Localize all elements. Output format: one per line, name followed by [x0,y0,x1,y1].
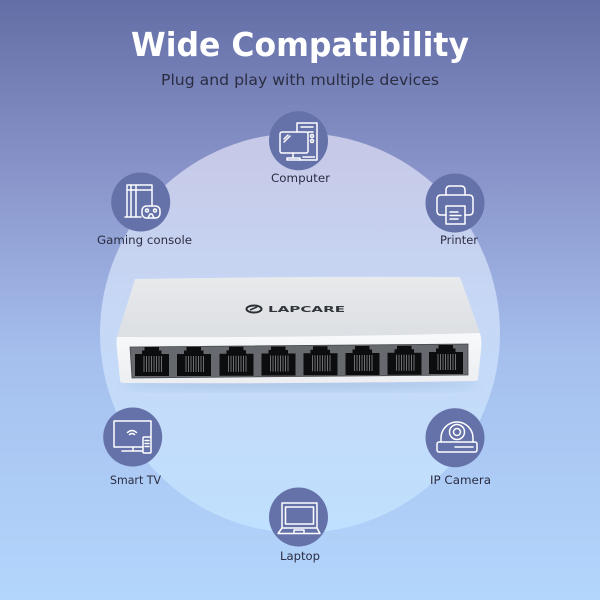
title: Wide Compatibility [131,25,469,64]
device: ip camera [426,408,491,487]
device: gaming console: Gaming console [97,233,192,247]
switch front [116,333,481,383]
device: printer [426,174,484,247]
device: computer [269,111,330,185]
device: laptop [269,488,328,563]
device: printer: Printer [440,233,478,247]
device: smart tv [103,408,162,487]
background circle [100,133,500,533]
subtitle: Plug and play with multiple devices [161,71,439,89]
switch shadow [120,379,480,389]
switch top [117,277,480,337]
device: gaming console [97,172,192,247]
ports [135,345,463,376]
device: laptop: Laptop [280,549,320,563]
device: computer: Computer [271,171,330,185]
network switch [116,277,481,389]
device: ip camera: IP Camera [430,473,491,487]
port panel [130,344,468,378]
logo [246,305,345,314]
logo: LAPCARE [268,305,345,314]
device: smart tv: Smart TV [110,473,161,487]
